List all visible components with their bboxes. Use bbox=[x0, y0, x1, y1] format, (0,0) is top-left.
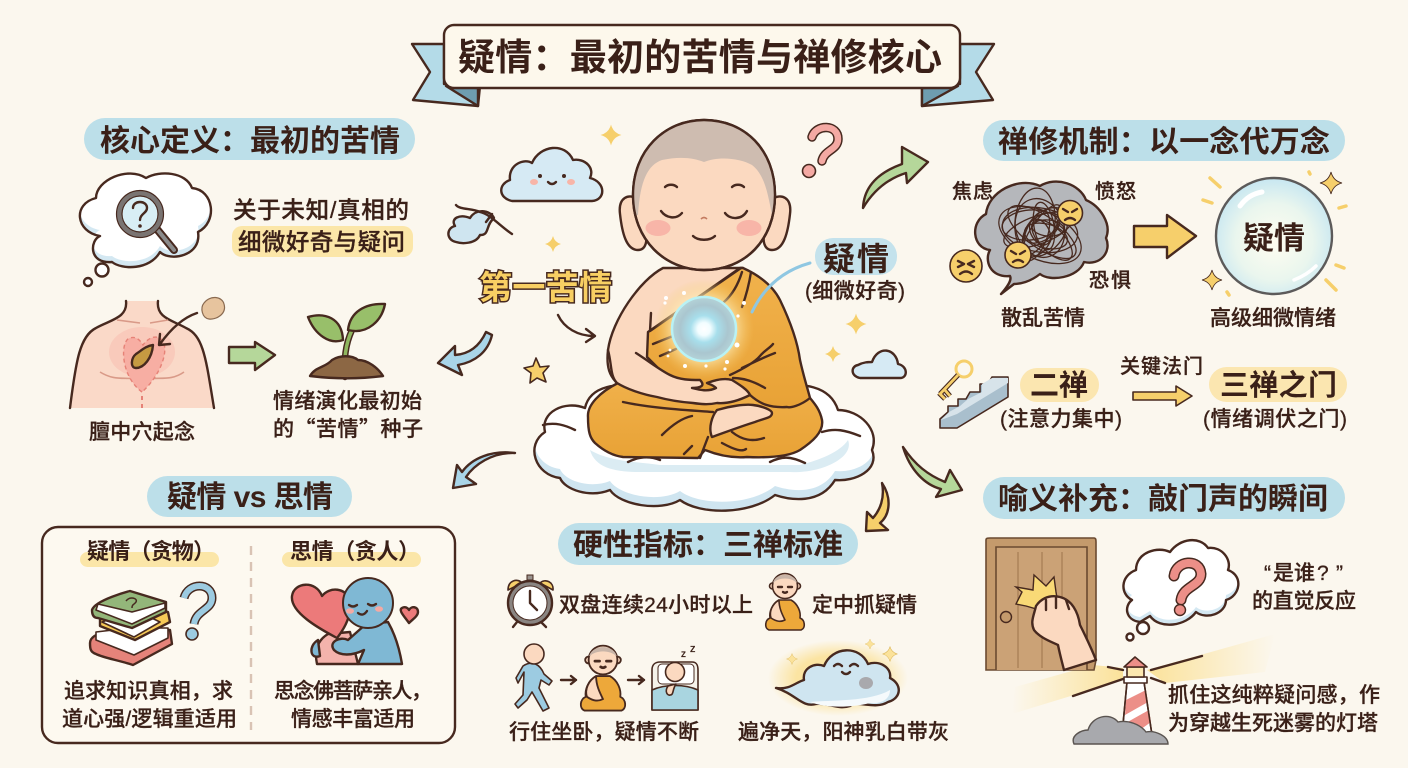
label: acupoint: 膻中穴起念 bbox=[89, 420, 195, 444]
panel: doubt vs longing bbox=[42, 476, 455, 743]
illustration: clear bubble bbox=[1202, 172, 1346, 295]
text: who is it bbox=[1252, 562, 1356, 613]
icon: book stack bbox=[90, 591, 172, 665]
text: curiosity definition: 关于未知/真相的 bbox=[233, 197, 409, 223]
text: seed of emotion: 的“苦情”种子 bbox=[273, 413, 423, 443]
text: lighthouse metaphor bbox=[1168, 684, 1380, 735]
arm and hands bbox=[608, 350, 750, 404]
arrow: green bbox=[229, 342, 275, 370]
pill: second dhyana bbox=[1000, 368, 1122, 431]
title banner bbox=[412, 25, 994, 106]
text: who is it: 的直觉反应 bbox=[1252, 590, 1356, 613]
arrow: green to top right bbox=[863, 147, 928, 208]
pill: third dhyana gate: 三禅之门 bbox=[1220, 369, 1337, 402]
heading: comparison bbox=[147, 476, 352, 517]
icon: thought cloud question bbox=[1123, 535, 1238, 640]
beam: lighthouse light bbox=[1012, 634, 1275, 714]
illustration: clear bubble: 疑情 bbox=[1243, 221, 1305, 256]
label: doubt emotion: (细微好奇) bbox=[805, 280, 905, 303]
arrow: key method: 关键法门 bbox=[1120, 355, 1203, 378]
cloud seat bbox=[534, 376, 874, 511]
labels: scattered emotions: 愤怒 bbox=[1095, 180, 1136, 203]
panel: hard standards bbox=[508, 523, 949, 744]
heading: core definition: 核心定义：最初的苦情 bbox=[100, 125, 400, 158]
panel: central monk figure bbox=[534, 115, 874, 511]
text: double-lotus: 双盘连续24小时以上 bbox=[559, 594, 753, 617]
illustration: tangled thought cloud bbox=[950, 182, 1108, 294]
pill: second dhyana: 二禅 bbox=[1030, 369, 1088, 402]
column: longing bbox=[274, 539, 432, 731]
column: doubt bbox=[62, 539, 237, 731]
robe folds bbox=[623, 268, 775, 458]
robe torso bbox=[647, 268, 810, 407]
text: who is it: ” bbox=[1336, 562, 1343, 585]
title banner: 疑情：最初的苦情与禅修核心 bbox=[458, 37, 942, 78]
arrow: green to bottom right bbox=[903, 447, 962, 497]
arrows: sequence bbox=[561, 676, 644, 684]
arrow: yellow to bottom bbox=[866, 483, 889, 531]
labels: scattered emotions: 散乱苦情 bbox=[1001, 307, 1085, 330]
heading: mechanism: 禅修机制：以一念代万念 bbox=[998, 125, 1330, 159]
text: who is it: 是谁 bbox=[1273, 562, 1315, 585]
column: longing: 情感丰富适用 bbox=[291, 708, 415, 731]
pill: third dhyana gate bbox=[1203, 367, 1347, 431]
label: first bitter emotion: 第一苦情 bbox=[479, 269, 612, 306]
icon: stairs bbox=[940, 377, 1008, 428]
arrow: blue to bottom left bbox=[453, 452, 515, 488]
arrow: yellow big bbox=[1134, 215, 1196, 258]
ears bbox=[620, 196, 790, 250]
text: lighthouse metaphor: 为穿越生死迷雾的灯塔 bbox=[1168, 712, 1378, 735]
heading: comparison: 疑情 vs 思情 bbox=[167, 481, 333, 514]
panel: meditation mechanism bbox=[939, 120, 1347, 431]
icon: glowing cloud bbox=[768, 639, 908, 716]
body: skin bbox=[607, 268, 743, 405]
icon: bed sleeping: z bbox=[681, 649, 686, 660]
label: doubt emotion bbox=[752, 238, 905, 312]
icon: key bbox=[939, 361, 972, 399]
label: doubt emotion: 疑情 bbox=[823, 241, 889, 277]
arrow: blue to core definition bbox=[438, 332, 492, 375]
text: curiosity definition bbox=[232, 197, 413, 257]
comparison box bbox=[42, 527, 455, 743]
text: continuous doubt: 行住坐卧，疑情不断 bbox=[509, 721, 699, 744]
text: lighthouse metaphor: 抓住这纯粹疑问感，作 bbox=[1168, 684, 1380, 707]
illustration: lighthouse bbox=[1073, 656, 1202, 744]
decor: small cloud right bbox=[853, 351, 906, 378]
pill: third dhyana gate: (情绪调伏之门) bbox=[1203, 408, 1347, 431]
arrow: key method bbox=[1120, 355, 1203, 406]
text: seed of emotion: 情绪演化最初始 bbox=[273, 390, 422, 413]
icon: walking figure bbox=[515, 644, 552, 711]
icon: bed sleeping: z bbox=[690, 643, 696, 655]
text: seed of emotion bbox=[273, 390, 423, 443]
icon: bed sleeping bbox=[652, 643, 698, 710]
illustration: torso with seed bbox=[70, 297, 225, 408]
pill: second dhyana: (注意力集中) bbox=[1000, 408, 1122, 431]
decor: smiling cloud bbox=[501, 148, 602, 201]
arrow: gray pointer bbox=[558, 315, 595, 342]
foot bbox=[710, 405, 772, 437]
panel: metaphor of knocking bbox=[983, 477, 1380, 744]
head bbox=[630, 115, 780, 270]
labels: scattered emotions: 恐惧 bbox=[1089, 269, 1131, 292]
column: doubt: 追求知识真相，求 bbox=[64, 680, 233, 703]
column: longing: 思情（贪人） bbox=[290, 539, 420, 564]
decor: pink question mark bbox=[802, 127, 838, 178]
decor: stars bbox=[524, 124, 866, 383]
robe legs bbox=[588, 375, 822, 458]
illustration: door and knocking hand bbox=[986, 538, 1096, 670]
heading: metaphor: 喻义补充：敲门声的瞬间 bbox=[998, 483, 1328, 516]
text: curiosity definition: 细微好奇与疑问 bbox=[238, 229, 405, 255]
column: longing: 思念佛菩萨亲人， bbox=[274, 679, 432, 703]
text: grasp doubt: 定中抓疑情 bbox=[812, 594, 917, 617]
panel: core definition bbox=[70, 118, 423, 444]
icon: seated monk medium bbox=[581, 646, 625, 711]
orb of doubt bbox=[654, 279, 754, 379]
icon: seated monk small bbox=[766, 574, 804, 630]
column: doubt: 道心强/逻辑重适用 bbox=[62, 708, 237, 731]
labels: scattered emotions bbox=[952, 180, 1136, 330]
text: heaven: 遍净天，阳神乳白带灰 bbox=[738, 721, 949, 744]
heading: standards: 硬性指标：三禅标准 bbox=[573, 529, 843, 562]
icon: person hugging heart bbox=[292, 578, 418, 664]
text: who is it: ? bbox=[1317, 562, 1329, 585]
icon: alarm clock bbox=[508, 575, 553, 627]
icon: sprout bbox=[308, 304, 385, 378]
icon: blue question mark bbox=[184, 586, 212, 640]
icon: thought cloud with magnifier bbox=[80, 167, 211, 286]
labels: scattered emotions: 焦虑 bbox=[952, 180, 993, 203]
text: who is it: “ bbox=[1264, 562, 1271, 585]
decor: wispy cloud bbox=[448, 205, 512, 243]
column: doubt: 疑情（贪物） bbox=[87, 539, 215, 564]
label: subtle emotion: 高级细微情绪 bbox=[1210, 307, 1336, 330]
